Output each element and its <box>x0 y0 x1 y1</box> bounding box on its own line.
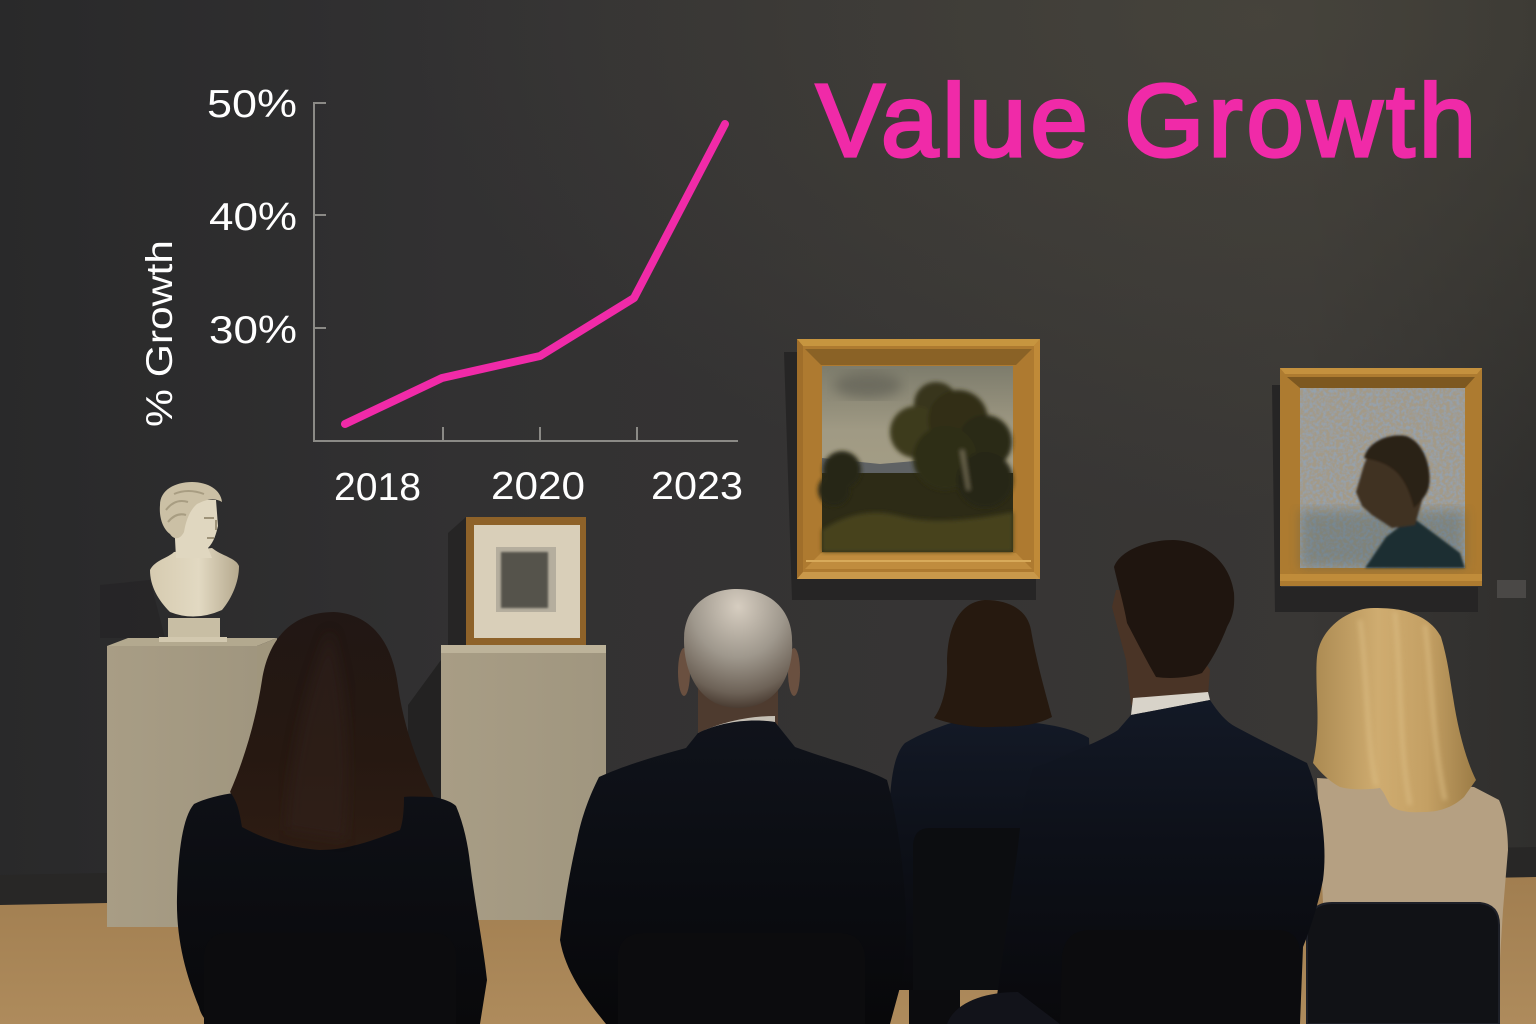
landscape painting <box>784 339 1040 600</box>
distant hills <box>822 458 940 480</box>
head <box>684 589 792 708</box>
person: blonde woman <box>1307 608 1508 1024</box>
plinth <box>159 637 227 642</box>
front <box>107 646 257 927</box>
frame shadow <box>448 517 466 645</box>
dotted canvas <box>1300 388 1465 568</box>
drawing paper <box>496 547 556 612</box>
shoulders <box>150 548 239 617</box>
jacket <box>993 700 1324 1024</box>
legs <box>909 980 960 1024</box>
ear and neck <box>1112 590 1210 705</box>
pointillist portrait painting <box>1272 368 1482 612</box>
chair <box>204 933 456 1024</box>
person: woman left <box>177 612 487 1024</box>
gold frame <box>797 339 1040 579</box>
person: woman centre back <box>890 600 1100 1024</box>
jacket <box>560 720 906 1024</box>
meadow <box>822 473 1013 552</box>
line chart <box>139 83 743 509</box>
stool <box>947 992 1060 1024</box>
hair <box>934 600 1052 727</box>
hair <box>160 482 222 538</box>
y axis labels: 30% <box>209 309 297 352</box>
jacket <box>177 792 487 1024</box>
hair <box>1313 608 1476 812</box>
person: man right <box>947 540 1324 1024</box>
drawing <box>501 552 548 608</box>
chair <box>618 933 865 1024</box>
y axis labels: 50% <box>207 83 297 126</box>
wall shadow <box>100 580 165 638</box>
growth line <box>345 124 725 424</box>
neck <box>698 680 778 735</box>
wall label <box>1497 580 1526 598</box>
right pedestal <box>408 517 606 920</box>
frame <box>466 517 586 645</box>
y axis title: % Growth <box>139 240 180 427</box>
cloud <box>834 372 902 398</box>
jacket <box>1317 778 1508 1024</box>
wooden floor <box>0 877 1536 1024</box>
front <box>441 653 606 920</box>
neck and face <box>174 500 218 558</box>
wall shadow <box>408 660 441 900</box>
left pedestal <box>100 580 277 927</box>
hair <box>1114 540 1234 678</box>
gold frame <box>1280 368 1482 586</box>
x axis labels: 2020 <box>491 465 585 508</box>
y axis labels: 40% <box>209 196 297 239</box>
y axis labels <box>207 83 297 352</box>
audience <box>177 540 1508 1024</box>
ears <box>678 648 690 696</box>
chair <box>913 828 1040 990</box>
canvas lower tint <box>1300 510 1465 568</box>
shoulders <box>1365 517 1465 568</box>
person: bald man centre <box>560 589 906 1024</box>
curls <box>166 491 204 522</box>
hair <box>1364 435 1430 508</box>
collar <box>698 716 775 738</box>
hair <box>230 612 434 850</box>
foreground grass <box>822 512 1013 552</box>
collar <box>1131 692 1210 715</box>
hair highlights <box>1360 612 1445 805</box>
title: Value Growth <box>816 63 1476 178</box>
small framed drawing <box>466 517 586 645</box>
facial features <box>204 518 216 538</box>
trees <box>818 382 1013 508</box>
hair strands <box>285 630 349 840</box>
cast shadow <box>1272 385 1478 612</box>
x axis labels: 2018 <box>334 466 421 509</box>
chair <box>1060 930 1300 1024</box>
x axis labels: 2023 <box>651 465 743 508</box>
mat <box>474 525 580 638</box>
sky <box>822 366 1013 552</box>
face <box>1356 450 1425 528</box>
silhouette <box>1356 435 1465 568</box>
chair <box>1307 903 1499 1024</box>
chart axes <box>314 103 738 441</box>
side <box>257 638 277 927</box>
cast shadow <box>784 352 1036 600</box>
cap <box>441 645 606 653</box>
bust sculpture <box>150 482 239 642</box>
top <box>107 638 277 646</box>
jacket <box>890 723 1100 990</box>
x axis labels <box>334 465 743 509</box>
